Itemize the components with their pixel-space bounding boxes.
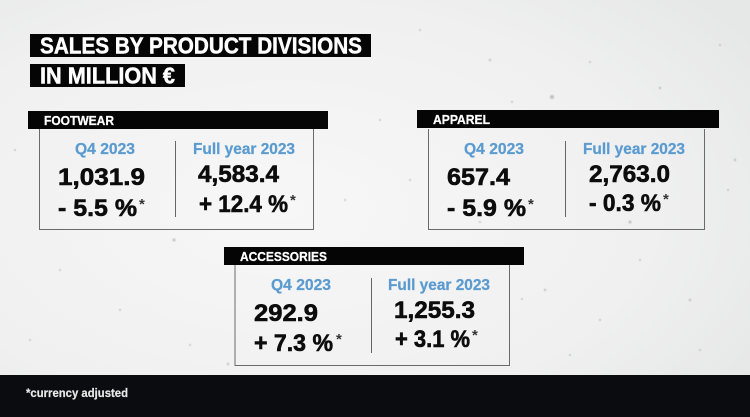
apparel full year column [583, 141, 685, 217]
apparel q4 column: Q4 2023 [464, 141, 524, 158]
apparel full year column: * [663, 191, 669, 208]
apparel heading [417, 110, 719, 128]
accessories q4 column: + 7.3 % [254, 330, 333, 357]
footwear full year column: * [290, 192, 296, 209]
footwear heading: FOOTWEAR [44, 113, 115, 128]
accessories heading: ACCESSORIES [240, 249, 327, 264]
accessories frame [235, 265, 510, 366]
panel: apparel [417, 110, 719, 230]
footwear q4 column: * [139, 196, 145, 213]
apparel full year column: - 0.3 % [589, 190, 661, 217]
accessories q4 column: Q4 2023 [271, 277, 331, 294]
accessories heading [224, 247, 524, 265]
accessories full year column [388, 277, 490, 353]
panel: accessories [224, 247, 524, 366]
apparel q4 column [447, 141, 534, 222]
footwear q4 column: 1,031.9 [58, 164, 145, 191]
footwear full year column [193, 141, 296, 218]
panel: footwear [28, 111, 328, 230]
footwear q4 column: Q4 2023 [75, 141, 135, 158]
footwear full year column: 4,583.4 [198, 161, 280, 188]
title [30, 32, 371, 88]
apparel full year column: Full year 2023 [583, 141, 685, 158]
accessories full year column: 1,255.3 [394, 297, 475, 324]
apparel q4 column: * [528, 196, 534, 213]
accessories divider [371, 278, 372, 353]
accessories full year column: Full year 2023 [388, 277, 490, 294]
footer band [0, 375, 750, 417]
apparel full year column: 2,763.0 [589, 161, 670, 188]
footwear q4 column: - 5.5 % [58, 195, 137, 222]
footwear full year column: + 12.4 % [199, 191, 288, 218]
footwear heading [28, 111, 328, 129]
accessories q4 column: * [336, 331, 342, 348]
footwear frame [40, 129, 314, 230]
title: SALES BY PRODUCT DIVISIONS [40, 32, 362, 58]
footwear divider [175, 141, 176, 217]
footwear q4 column [58, 141, 145, 222]
apparel divider [565, 141, 566, 217]
apparel q4 column: - 5.9 % [447, 195, 526, 222]
accessories full year column: * [472, 327, 478, 344]
title: IN MILLION € [40, 62, 175, 88]
footwear full year column: Full year 2023 [193, 141, 295, 158]
apparel frame [428, 129, 704, 230]
footnote: *currency adjusted [26, 388, 128, 400]
accessories q4 column [254, 277, 342, 357]
accessories q4 column: 292.9 [254, 300, 318, 327]
apparel q4 column: 657.4 [447, 164, 511, 191]
apparel heading: APPAREL [433, 112, 490, 127]
accessories full year column: + 3.1 % [395, 326, 470, 353]
